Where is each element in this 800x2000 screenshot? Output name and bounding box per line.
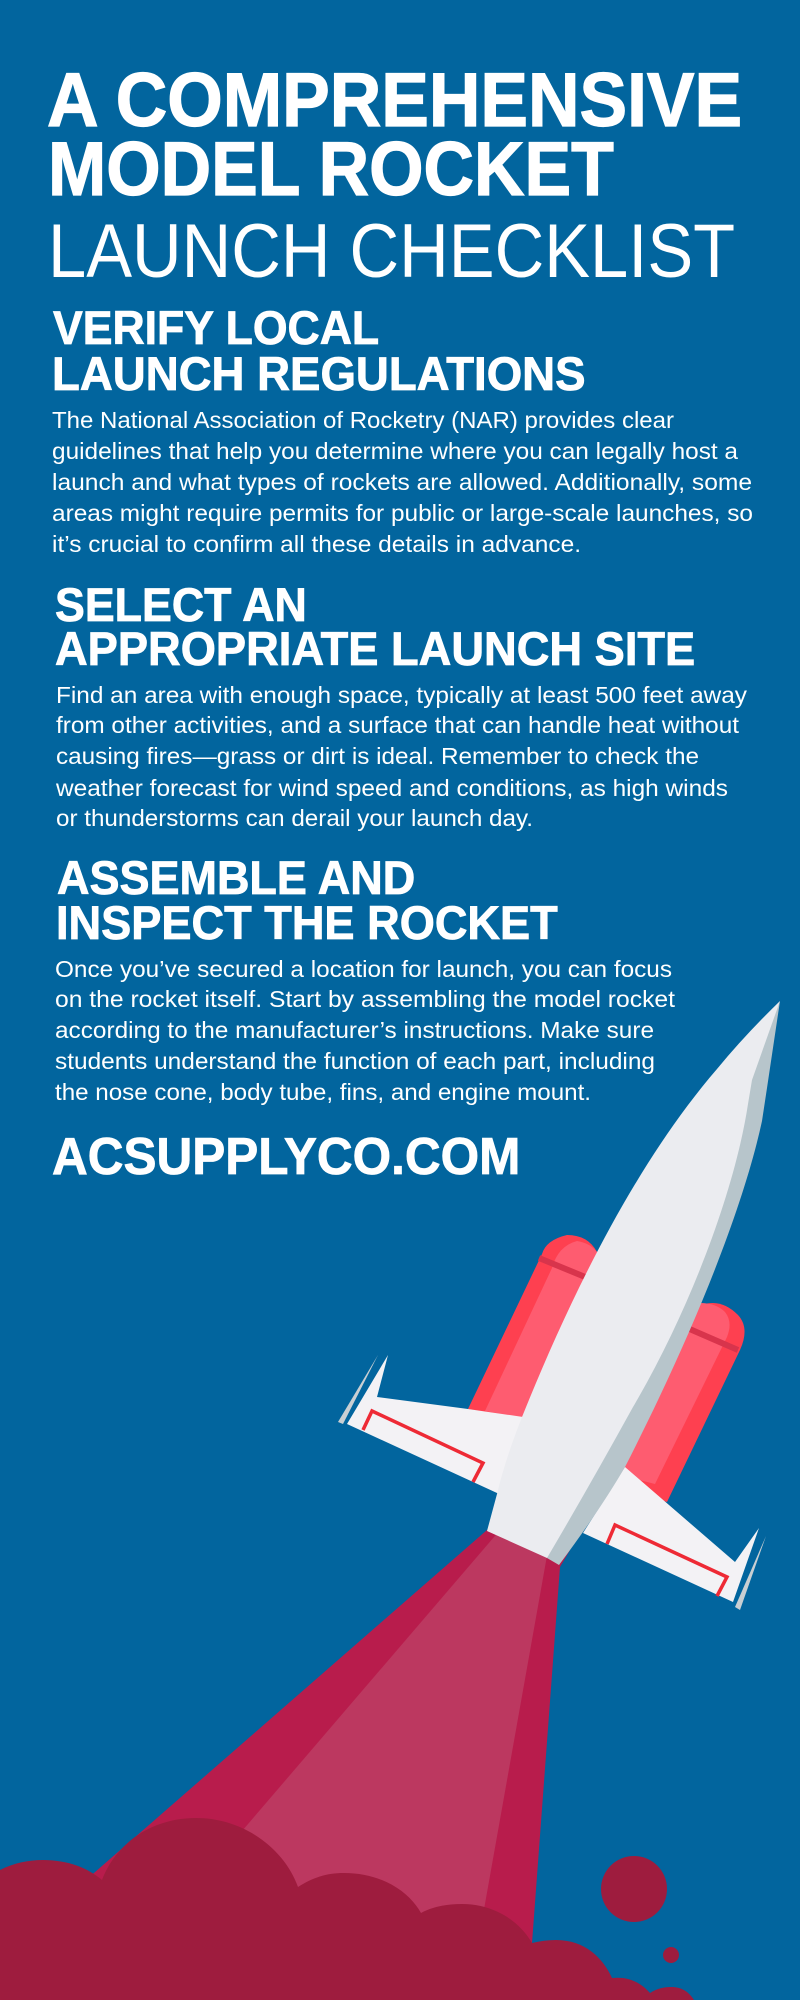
title <box>47 57 742 294</box>
left wing <box>338 1355 530 1500</box>
title: A COMPREHENSIVE <box>47 57 742 142</box>
text block: launch site body: Find an area with enough space, typically at least 500 feet away <box>56 682 747 708</box>
heading: verify local launch regulations: VERIFY LOCAL <box>53 302 379 354</box>
heading: assemble and inspect the rocket <box>56 851 558 949</box>
text block: assemble body: according to the manufacturer’s instructions. Make sure <box>55 1017 654 1043</box>
website url: ACSUPPLYCO.COM <box>52 1127 520 1185</box>
right booster <box>600 1303 745 1502</box>
heading: verify local launch regulations: LAUNCH REGULATIONS <box>52 347 586 400</box>
title: MODEL ROCKET <box>48 127 614 212</box>
text block: regulations body: areas might require permits for public or large-scale launches, so <box>52 500 753 526</box>
text block: assemble body <box>55 956 675 1105</box>
title: LAUNCH CHECKLIST <box>48 209 735 294</box>
exhaust plume <box>47 1520 570 1970</box>
smoke cloud <box>0 1818 694 2000</box>
heading: verify local launch regulations <box>52 302 586 400</box>
text block: launch site body <box>55 682 747 831</box>
text block: regulations body: it’s crucial to confirm all these details in advance. <box>52 531 581 557</box>
text block: launch site body: causing fires—grass or dirt is ideal. Remember to check the <box>56 743 699 769</box>
text block: launch site body: or thunderstorms can derail your launch day. <box>56 805 533 831</box>
text block: regulations body <box>52 407 753 557</box>
right wing <box>583 1467 766 1610</box>
panel: verify local launch regulations <box>52 302 753 557</box>
rocket body <box>487 1001 780 1558</box>
text block: regulations body: launch and what types of rockets are allowed. Additionally, some <box>52 469 752 495</box>
heading: select an appropriate launch site <box>55 578 695 675</box>
text block: assemble body: on the rocket itself. Start by assembling the model rocket <box>55 986 675 1012</box>
panel: select an appropriate launch site <box>55 578 747 831</box>
text block: launch site body: from other activities, and a surface that can handle heat without <box>56 712 739 738</box>
text block: launch site body: weather forecast for wind speed and conditions, as high winds <box>55 775 728 801</box>
text block: assemble body: Once you’ve secured a location for launch, you can focus <box>55 956 672 982</box>
heading: assemble and inspect the rocket: ASSEMBLE AND <box>57 851 415 904</box>
text block: assemble body: students understand the function of each part, including <box>55 1048 655 1074</box>
smoke puff small <box>663 1947 679 1963</box>
panel: assemble and inspect the rocket <box>55 851 675 1105</box>
left booster <box>468 1235 625 1425</box>
heading: select an appropriate launch site: APPROPRIATE LAUNCH SITE <box>55 622 695 675</box>
smoke puff large <box>601 1856 667 1922</box>
rocket body shadow <box>547 1001 780 1565</box>
text block: regulations body: guidelines that help you determine where you can legally host a <box>52 438 739 464</box>
text block: regulations body: The National Association of Rocketry (NAR) provides clear <box>52 407 674 433</box>
heading: select an appropriate launch site: SELECT AN <box>55 578 307 631</box>
rocket <box>338 1001 780 1610</box>
text block: assemble body: the nose cone, body tube, fins, and engine mount. <box>55 1079 591 1105</box>
heading: assemble and inspect the rocket: INSPECT THE ROCKET <box>56 896 558 949</box>
